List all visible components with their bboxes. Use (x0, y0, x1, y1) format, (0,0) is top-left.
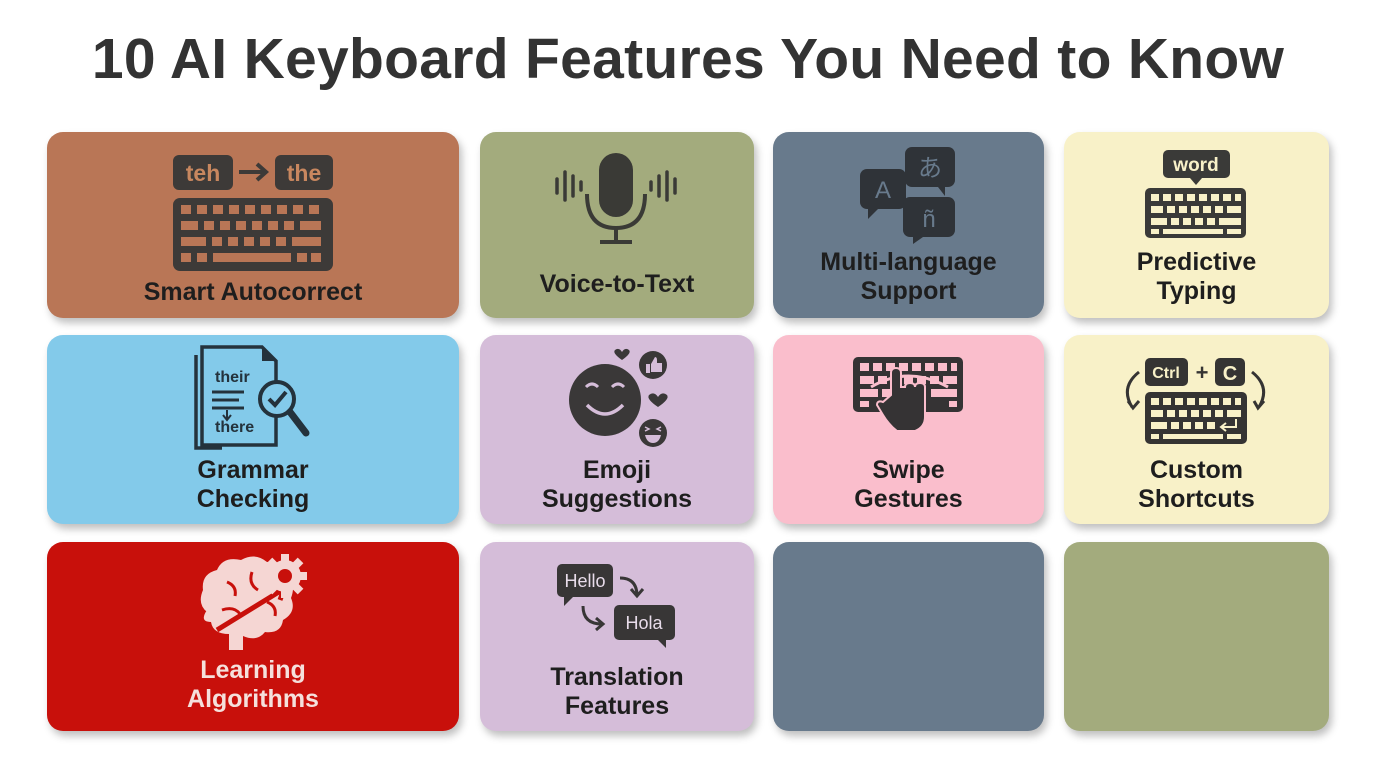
icon: word keyboard (1145, 150, 1246, 238)
icon: smiley with reactions (569, 348, 668, 447)
label (1137, 248, 1256, 305)
label: Support (861, 277, 956, 305)
label (854, 456, 963, 513)
label: Learning (200, 656, 306, 684)
icon: brain with gear (200, 554, 307, 650)
label (187, 656, 319, 713)
icon: ctrl+c keyboard: + (1196, 360, 1208, 385)
label: Typing (1156, 277, 1237, 305)
icon: document magnifier (194, 345, 310, 450)
panel: learning algorithms (47, 542, 459, 731)
label (197, 456, 309, 513)
icon: autocorrect keyboard: the (287, 160, 321, 186)
label (1138, 456, 1255, 513)
label: Smart Autocorrect (144, 278, 362, 306)
icon: document magnifier: there (215, 419, 254, 436)
panel: emoji suggestions (480, 335, 754, 524)
label: Voice-to-Text (540, 270, 694, 298)
icon: ctrl+c keyboard: Ctrl (1152, 365, 1180, 382)
label: Custom (1150, 456, 1243, 484)
icon: keyboard with swiping hand (853, 357, 963, 430)
panel: custom shortcuts (1064, 335, 1329, 524)
icon: language bubbles: ñ (922, 206, 936, 233)
icon: microphone (555, 153, 677, 244)
panel: voice-to-text (480, 132, 754, 318)
icon: ctrl+c keyboard: C (1223, 363, 1237, 385)
label (542, 456, 692, 513)
panel: empty slate (773, 542, 1044, 731)
label: Multi-language (820, 248, 997, 276)
icon: ctrl+c keyboard (1126, 358, 1266, 444)
label (550, 663, 684, 720)
panel: multi-language (773, 132, 1044, 318)
icon: document magnifier: their (215, 369, 250, 386)
icon: language bubbles: A (875, 177, 891, 204)
label: Algorithms (187, 685, 319, 713)
label: Shortcuts (1138, 485, 1255, 513)
icon: hello hola bubbles: Hola (625, 613, 663, 633)
panel: predictive typing (1064, 132, 1329, 318)
label: Swipe (872, 456, 945, 484)
panel: smart autocorrect (47, 132, 459, 318)
label: Translation (550, 663, 684, 691)
label (820, 248, 997, 305)
icon: word keyboard: word (1172, 155, 1219, 176)
icon: autocorrect keyboard: teh (186, 160, 220, 186)
icon: language bubbles: あ (918, 148, 942, 183)
label: Predictive (1137, 248, 1256, 276)
label: Gestures (854, 485, 963, 513)
label: Checking (197, 485, 309, 513)
icon: hello hola bubbles: Hello (564, 571, 606, 591)
label: Grammar (197, 456, 309, 484)
panel: swipe gestures (773, 335, 1044, 524)
icon: language bubbles (860, 147, 955, 244)
panel: translation features (480, 542, 754, 731)
label: Suggestions (542, 485, 692, 513)
panel: grammar checking (47, 335, 459, 524)
panel: empty olive (1064, 542, 1329, 731)
label: Emoji (583, 456, 651, 484)
icon: hello hola bubbles (557, 564, 675, 648)
title: 10 AI Keyboard Features You Need to Know (92, 27, 1284, 91)
label: Features (565, 692, 669, 720)
icon: autocorrect keyboard (173, 155, 333, 271)
